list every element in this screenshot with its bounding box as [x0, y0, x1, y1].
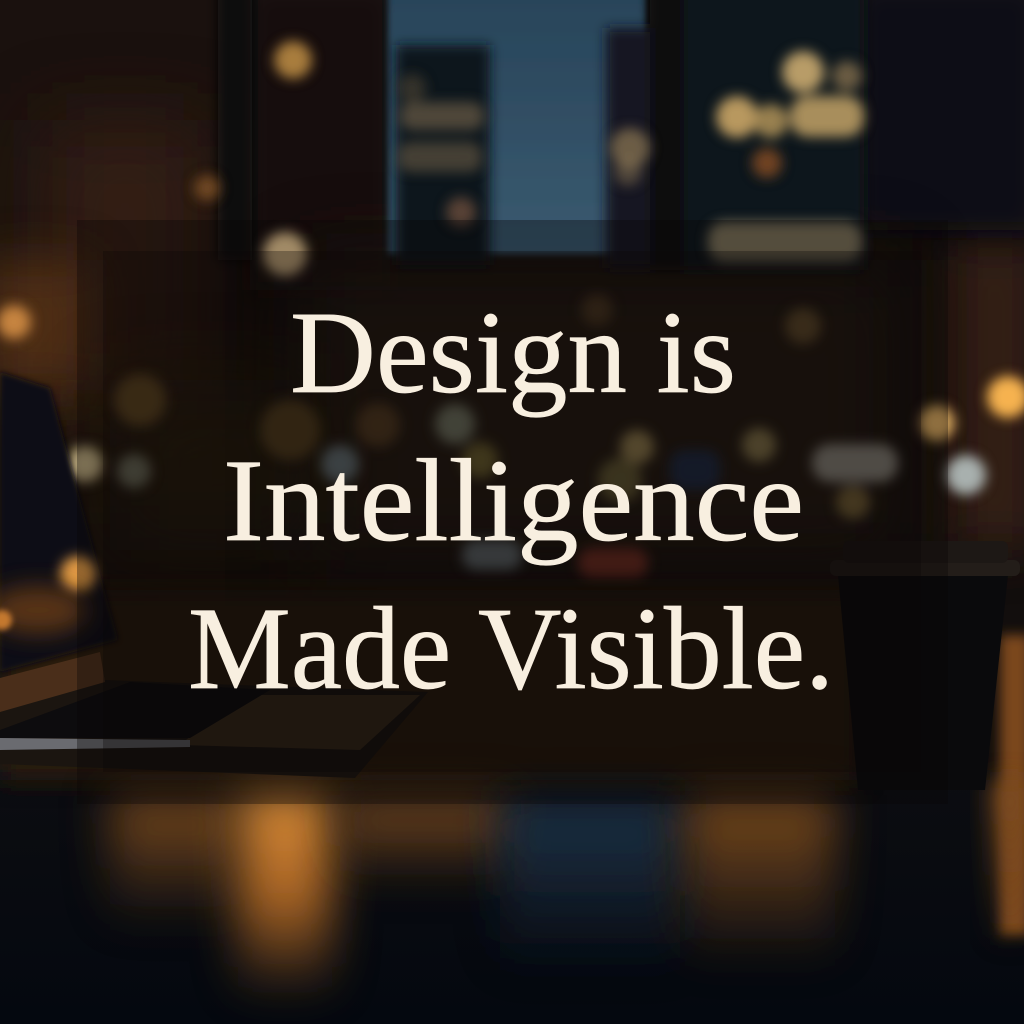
line 3: Made Visible.	[188, 583, 834, 714]
line 2: Intelligence	[223, 435, 804, 566]
laptop	[0, 372, 428, 778]
laptop base	[0, 680, 428, 778]
quote text	[188, 287, 834, 714]
line 1: Design is	[290, 287, 736, 418]
overlay panel: inner translucent box	[103, 251, 921, 772]
coffee cup	[830, 541, 1020, 790]
laptop screen	[0, 372, 118, 672]
background: sky gap	[388, 0, 646, 255]
tabletop with warm reflections	[0, 590, 1024, 1024]
background: tower blocks	[218, 0, 864, 270]
overlay panel: outer translucent frame	[77, 220, 948, 804]
background: bokeh lights	[0, 41, 1024, 578]
